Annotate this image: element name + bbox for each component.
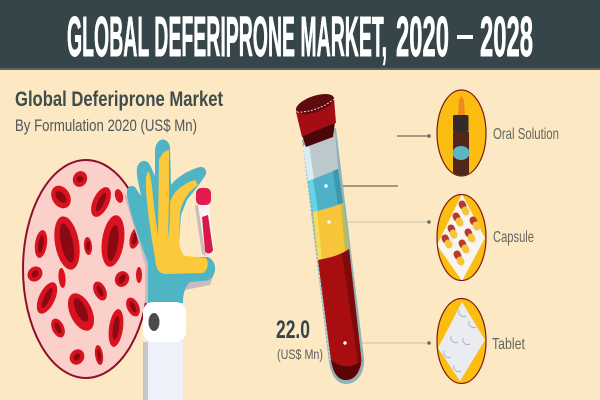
label: tablet: Tablet [492,336,525,353]
icon: capsule [437,194,486,281]
layer markers [324,184,328,188]
icon: oral solution [437,90,486,178]
icon: gloved hand holding sample tube [124,139,215,400]
header banner [0,0,600,70]
red layer [318,249,361,380]
hand shadow [124,194,214,303]
cuff sleeve [147,342,183,400]
icon: tablet [437,298,486,384]
mini sample tube [195,188,214,256]
glove [127,139,215,303]
chart heading: By Formulation 2020 (US$ Mn) [15,117,197,135]
label: oral solution: Oral Solution [493,126,559,143]
test tube [293,90,364,384]
cuff button [148,313,160,331]
glass highlight [303,148,330,360]
teal layer [308,169,343,212]
chart heading: Global Deferiprone Market [15,88,223,111]
leader lines [326,134,431,345]
yellow layer [313,203,349,260]
value callout: 22.0 [276,316,310,344]
title: 2020 [396,5,449,69]
label: capsule: Capsule [493,229,534,246]
value callout [276,316,323,362]
tube cap [302,122,335,147]
value callout: (US$ Mn) [277,346,323,362]
icon: blood cells under magnifier [23,160,149,378]
gray layer [303,132,338,181]
tube glass outline [302,128,364,384]
chart heading [15,88,223,135]
glove yellow palm and fingers [146,150,208,274]
